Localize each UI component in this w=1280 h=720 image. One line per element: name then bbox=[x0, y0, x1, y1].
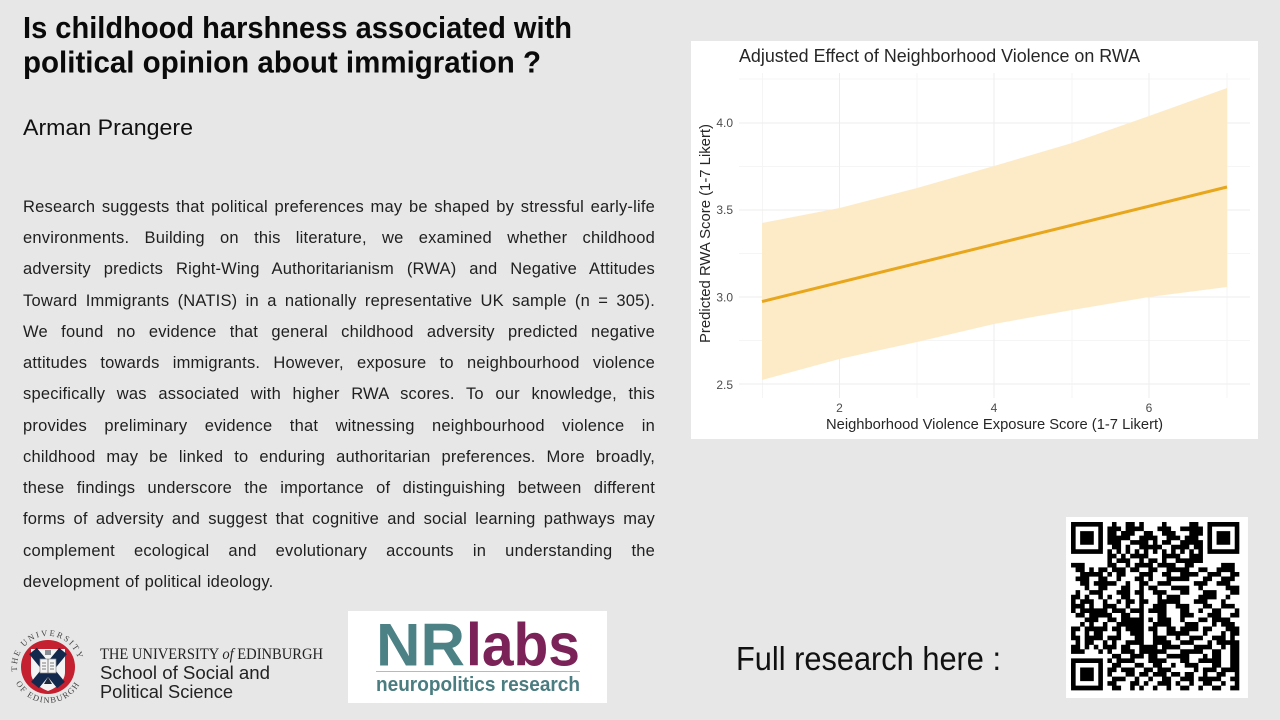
x axis tick labels: 4 bbox=[991, 401, 998, 415]
logo: NR labs neuropolitics research: NR bbox=[376, 612, 465, 678]
abstract text block: forms of adversity and suggest that cognitive and social learning pathways may bbox=[23, 510, 655, 528]
abstract text block: provides preliminary evidence that witnessing neighbourhood violence in bbox=[23, 417, 655, 435]
logo: University of Edinburgh crest: THE UNIVERSITY bbox=[11, 630, 84, 672]
abstract text block: adversity predicts Right-Wing Authoritarianism (RWA) and Negative Attitudes bbox=[23, 260, 655, 278]
regression line bbox=[762, 187, 1227, 302]
y axis tick labels: 3.5 bbox=[716, 203, 733, 217]
abstract text block: these findings underscore the importance of distinguishing between different bbox=[23, 479, 655, 497]
logo: University of Edinburgh crest: OF EDINBURGH bbox=[16, 681, 80, 703]
y axis tick labels: 3.0 bbox=[716, 290, 733, 304]
x axis tick labels: 2 bbox=[836, 401, 843, 415]
x axis tick labels bbox=[836, 401, 1153, 415]
abstract text block: We found no evidence that general childhood adversity predicted negative bbox=[23, 323, 655, 341]
y axis tick labels: 4.0 bbox=[716, 116, 733, 130]
y axis tick labels: 2.5 bbox=[716, 378, 733, 392]
logo text: University of Edinburgh School of Social and Political Science: Political Science bbox=[100, 682, 233, 702]
logo: NR labs neuropolitics research: labs bbox=[466, 612, 580, 678]
abstract text block: attitudes towards immigrants. However, exposure to neighbourhood violence bbox=[23, 354, 655, 372]
chart title: Adjusted Effect of Neighborhood Violence on RWA bbox=[739, 46, 1140, 66]
x axis tick labels: 6 bbox=[1146, 401, 1153, 415]
abstract text block: childhood may be linked to enduring authoritarian preferences. More broadly, bbox=[23, 448, 655, 466]
title: political opinion about immigration ? bbox=[23, 44, 541, 80]
author name: Arman Prangere bbox=[23, 115, 193, 140]
logo text: University of Edinburgh School of Social and Political Science: School of Social and bbox=[100, 663, 270, 683]
abstract text block: complement ecological and evolutionary accounts in understanding the bbox=[23, 542, 655, 560]
abstract text block: specifically was associated with higher RWA scores. To our knowledge, this bbox=[23, 385, 655, 403]
logo: University of Edinburgh crest bbox=[11, 630, 84, 703]
logo: NR labs neuropolitics research bbox=[348, 611, 607, 703]
abstract text block: environments. Building on this literature, we examined whether childhood bbox=[23, 229, 655, 247]
logo text: University of Edinburgh School of Social and Political Science: THE UNIVERSITY of EDINBURGH bbox=[100, 646, 323, 663]
logo text: University of Edinburgh School of Social and Political Science bbox=[100, 646, 323, 702]
abstract text block: Research suggests that political preferences may be shaped by stressful early-life bbox=[23, 198, 655, 216]
abstract text block: Toward Immigrants (NATIS) in a nationally representative UK sample (n = 305). bbox=[23, 292, 655, 310]
QR code bbox=[1066, 517, 1248, 698]
x axis title: Neighborhood Violence Exposure Score (1-7 Likert) bbox=[826, 417, 1163, 433]
logo: NR labs neuropolitics research: neuropolitics research bbox=[376, 674, 580, 696]
abstract text block bbox=[23, 198, 655, 591]
title bbox=[23, 10, 572, 80]
abstract text block: development of political ideology. bbox=[23, 573, 273, 591]
call to action text: Full research here : bbox=[736, 640, 1001, 677]
title: Is childhood harshness associated with bbox=[23, 10, 572, 45]
y axis tick labels bbox=[716, 116, 733, 392]
y axis title: Predicted RWA Score (1-7 Likert) bbox=[698, 124, 714, 343]
panel: line chart of neighbourhood violence effect on RWA bbox=[691, 41, 1258, 439]
confidence ribbon bbox=[762, 88, 1227, 380]
